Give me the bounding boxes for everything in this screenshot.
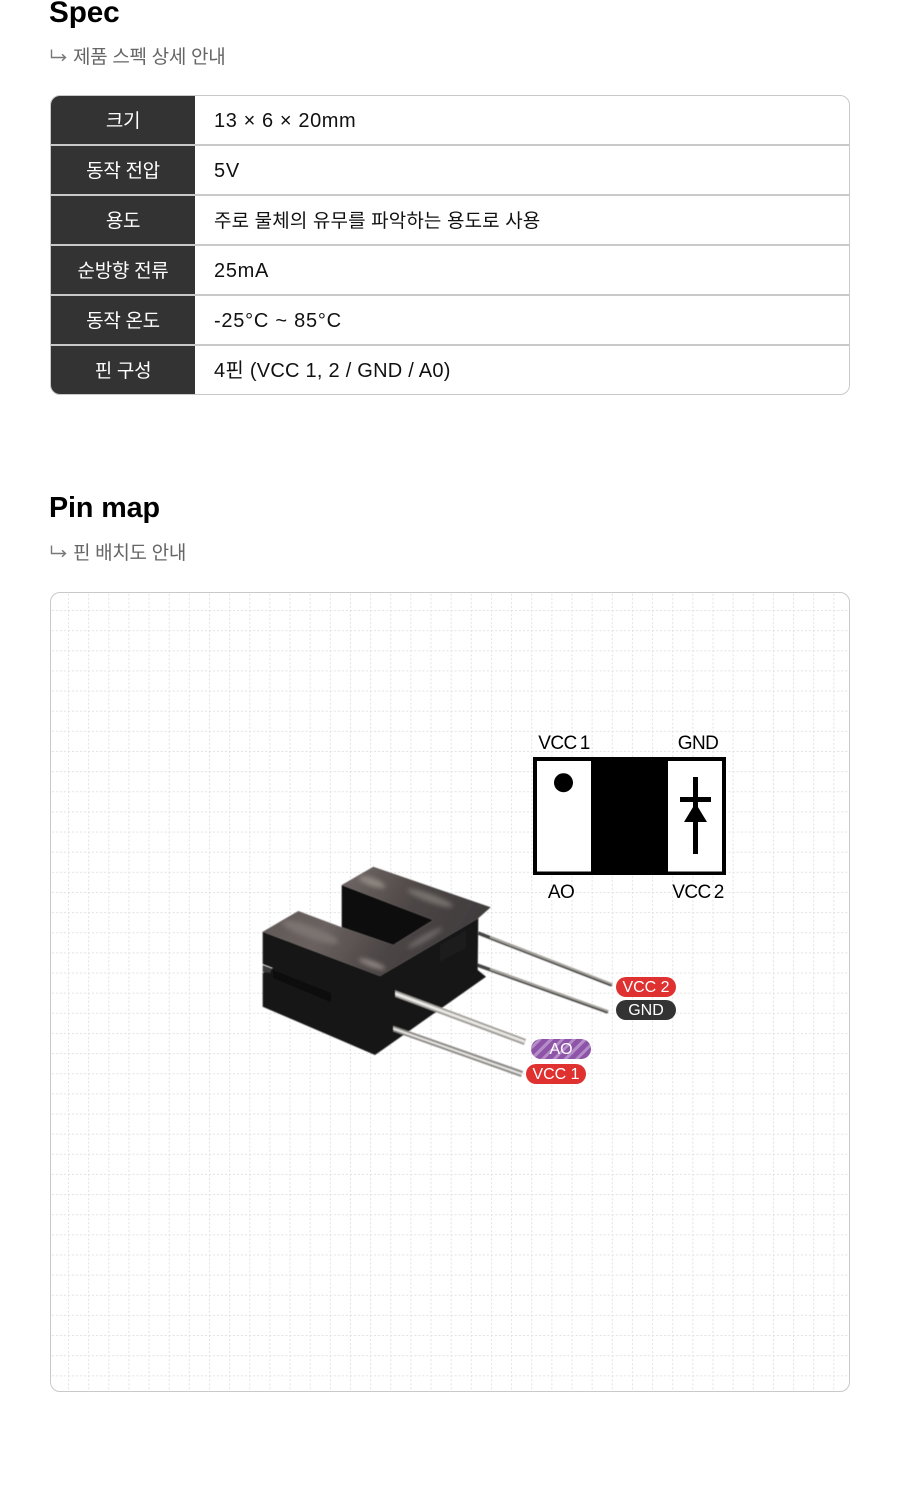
row: operating voltage	[51, 146, 240, 194]
sensor body	[263, 867, 491, 1055]
text: 제품 스펙 상세 안내	[73, 47, 225, 68]
row: operating temperature	[51, 296, 342, 344]
row: purpose: 주로 물체의 유무를 파악하는 용도로 사용	[214, 211, 540, 232]
panel: pin map canvas	[50, 592, 850, 1392]
pin tag: VCC 1	[526, 1064, 586, 1084]
label: AO: AO	[548, 882, 574, 903]
row: size: 13 × 6 × 20mm	[214, 110, 356, 132]
text: 핀 배치도 안내	[73, 543, 186, 564]
row: size: 크기	[106, 111, 140, 132]
subheading: pin layout	[50, 543, 186, 564]
label: VCC 2: VCC 2	[672, 882, 724, 903]
front pins	[393, 990, 526, 1077]
pin tag: AO: AO	[549, 1041, 573, 1058]
row: operating temperature: -25°C ~ 85°C	[214, 310, 342, 332]
label: VCC 1: VCC 1	[538, 733, 590, 754]
label: GND: GND	[678, 733, 718, 754]
row: pin configuration: 4핀 (VCC 1, 2 / GND / A0)	[214, 360, 451, 382]
panel: spec table	[50, 95, 850, 395]
back pins	[477, 933, 612, 1012]
row: operating voltage: 동작 전압	[86, 161, 160, 182]
schematic package	[533, 757, 726, 875]
row: size	[51, 96, 356, 144]
row: operating temperature: 동작 온도	[86, 311, 160, 332]
subheading: spec details	[50, 47, 225, 68]
pin diagram schematic	[533, 733, 726, 903]
row: pin configuration: 핀 구성	[95, 361, 151, 382]
pin tag: AO	[531, 1039, 591, 1059]
row: forward current: 순방향 전류	[78, 261, 168, 282]
row: pin configuration	[51, 346, 451, 394]
pin tag: VCC 2: VCC 2	[622, 979, 670, 996]
row: forward current	[51, 246, 269, 294]
surface highlights	[280, 873, 454, 972]
row: purpose	[51, 196, 540, 244]
pin tag: GND	[616, 1000, 676, 1020]
pin tag: VCC 1: VCC 1	[532, 1066, 580, 1083]
heading: Pin map: Pin map	[49, 492, 160, 524]
row: forward current: 25mA	[214, 260, 269, 282]
pin tag: VCC 2	[616, 977, 676, 997]
sensor photo illustration	[262, 866, 614, 1078]
pin tag: GND: GND	[628, 1002, 664, 1019]
row: purpose: 용도	[106, 211, 140, 232]
row: operating voltage: 5V	[214, 160, 240, 182]
